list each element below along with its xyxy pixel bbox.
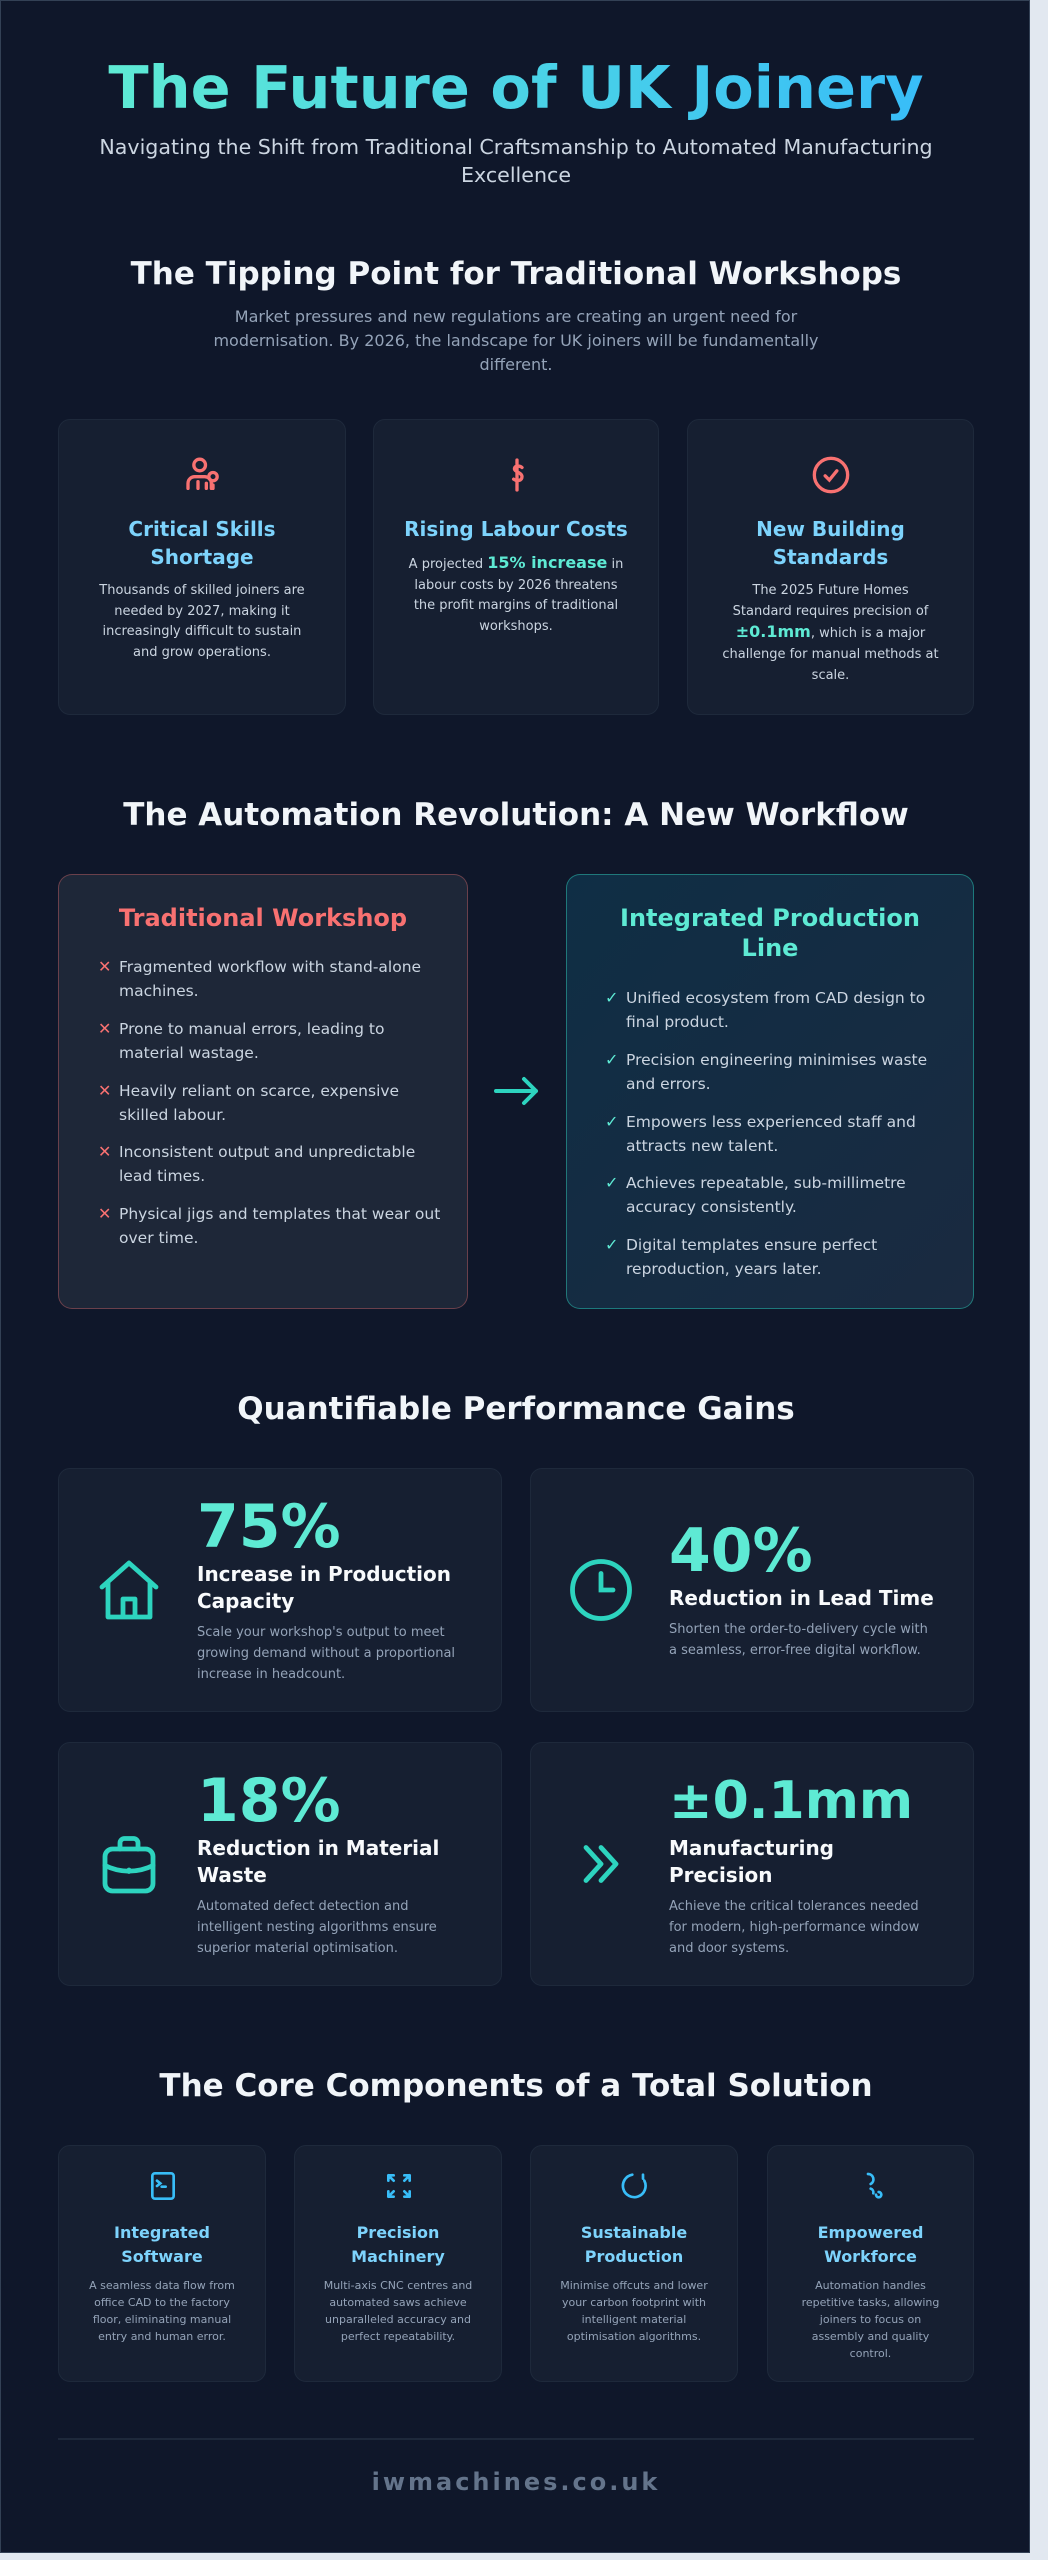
heading: performance gains: Quantifiable Performance Gains: [237, 1391, 795, 1427]
card: labour costs: A projected 15% increase in: [409, 553, 623, 572]
list: benefits: Achieves repeatable, sub-millimetre: [626, 1174, 906, 1192]
card: building standards: [687, 419, 974, 715]
panel: traditional workshop: ✕: [98, 1019, 111, 1038]
heading: tipping point: The Tipping Point for Traditional Workshops: [131, 256, 901, 292]
stat card: precision: ±0.1mm: [669, 1771, 913, 1831]
core card: workforce: Automation handles: [815, 2279, 926, 2292]
core card: machinery: Machinery: [351, 2247, 445, 2266]
card: labour costs: Rising Labour Costs: [404, 517, 628, 541]
footer: iwmachines.co.uk: [372, 2468, 660, 2496]
core card: sustainable: your carbon footprint with: [562, 2296, 706, 2309]
icon: briefcase: [102, 1836, 156, 1894]
title: The Future of UK Joinery: [108, 53, 924, 122]
core card: sustainable: intelligent material: [582, 2313, 686, 2326]
list: drawbacks: lead times.: [119, 1167, 205, 1185]
stat card: 18%: [58, 1742, 502, 1986]
card: building standards: The 2025 Future Homes: [752, 583, 909, 598]
stat card: 75%: Scale your workshop's output to meet: [197, 1625, 445, 1640]
core card: machinery: automated saws achieve: [329, 2296, 467, 2309]
icon: expand: [386, 2174, 412, 2198]
panel: integrated production line: ✓: [605, 988, 618, 1007]
icon: refresh: [622, 2173, 647, 2198]
core card: workforce: assembly and quality: [812, 2330, 929, 2343]
stat card: precision: Achieve the critical tolerances needed: [669, 1899, 919, 1914]
stat card: 75%: Capacity: [197, 1589, 294, 1613]
list: drawbacks: Physical jigs and templates that wear out: [119, 1205, 440, 1223]
card: skills shortage: Critical Skills: [128, 517, 276, 541]
stat card: 40%: a seamless, error-free digital workflow.: [669, 1643, 921, 1658]
stat card: precision: for modern, high-performance window: [669, 1920, 919, 1935]
stat card: 18%: superior material optimisation.: [197, 1941, 398, 1956]
card: skills shortage: and grow operations.: [133, 645, 271, 660]
core card: machinery: [294, 2145, 502, 2382]
panel: integrated production line: ✓: [605, 1235, 618, 1254]
stat card: 18%: intelligent nesting algorithms ensure: [197, 1920, 437, 1935]
panel: integrated production line: ✓: [605, 1050, 618, 1069]
subtitle: Excellence: [461, 163, 571, 187]
core card: sustainable: optimisation algorithms.: [567, 2330, 701, 2343]
intro paragraph: different.: [479, 355, 553, 374]
card: building standards: scale.: [812, 668, 849, 683]
card: skills shortage: Shortage: [150, 545, 254, 569]
list: benefits: reproduction, years later.: [626, 1260, 822, 1278]
core card: software: office CAD to the factory: [94, 2296, 230, 2309]
icon: check circle: [812, 456, 850, 494]
list: drawbacks: Prone to manual errors, leading to: [119, 1020, 384, 1038]
arrow: [494, 1076, 538, 1106]
panel: traditional workshop: ✕: [98, 957, 111, 976]
heading: core components: The Core Components of a Total Solution: [159, 2068, 873, 2104]
panel title: Traditional Workshop: [119, 904, 407, 932]
card: building standards: challenge for manual methods at: [722, 647, 939, 662]
panel: traditional workshop: [58, 874, 468, 1309]
panel title: Integrated Production: [620, 904, 920, 932]
core card: software: A seamless data flow from: [89, 2279, 235, 2292]
stat card: 40%: Shorten the order-to-delivery cycle with: [669, 1622, 928, 1637]
card: labour costs: [373, 419, 659, 715]
list: drawbacks: machines.: [119, 982, 199, 1000]
core card: sustainable: Minimise offcuts and lower: [560, 2279, 708, 2292]
stat card: 75%: Increase in Production: [197, 1562, 451, 1586]
list: benefits: attracts new talent.: [626, 1137, 778, 1155]
core card: sustainable: Sustainable: [581, 2223, 687, 2242]
card: labour costs: workshops.: [479, 619, 553, 634]
core card: workforce: [767, 2145, 974, 2382]
core card: software: [58, 2145, 266, 2382]
card: building standards: Standard requires precision of: [733, 604, 928, 619]
stat card: 75%: [58, 1468, 502, 1712]
icon: terminal: [151, 2172, 175, 2200]
list: benefits: and errors.: [626, 1075, 711, 1093]
subtitle: Navigating the Shift from Traditional Craftsmanship to Automated Manufacturing: [99, 135, 933, 159]
card: skills shortage: [58, 419, 346, 715]
panel: traditional workshop: ✕: [98, 1081, 111, 1100]
list: benefits: Empowers less experienced staff and: [626, 1113, 916, 1131]
core card: workforce: repetitive tasks, allowing: [802, 2296, 939, 2309]
list: benefits: accuracy consistently.: [626, 1198, 797, 1216]
intro paragraph: [213, 307, 819, 374]
stat card: precision: and door systems.: [669, 1941, 789, 1956]
stat card: 75%: growing demand without a proportional: [197, 1646, 455, 1661]
core card: machinery: Multi-axis CNC centres and: [324, 2279, 472, 2292]
stat card: 18%: Reduction in Material: [197, 1836, 439, 1860]
panel: traditional workshop: ✕: [98, 1204, 111, 1223]
icon: house: [100, 1560, 158, 1620]
core card: machinery: unparalleled accuracy and: [325, 2313, 471, 2326]
card: skills shortage: Thousands of skilled joiners are: [99, 583, 305, 598]
stat card: 18%: Automated defect detection and: [197, 1899, 408, 1914]
panel title: [620, 904, 920, 962]
icon: users: [186, 458, 219, 490]
core card: software: floor, eliminating manual: [93, 2313, 231, 2326]
core card: workforce: Empowered: [818, 2223, 923, 2242]
panel title: Line: [742, 934, 798, 962]
icon: workforce: [866, 2172, 883, 2199]
icon: chevrons: [584, 1845, 618, 1883]
list: drawbacks: Inconsistent output and unpredictable: [119, 1143, 415, 1161]
stat card: 40%: 40%: [669, 1516, 813, 1586]
card: building standards: ±0.1mm, which is a major: [736, 622, 925, 641]
core card: workforce: joiners to focus on: [820, 2313, 921, 2326]
card: skills shortage: increasingly difficult to sustain: [103, 624, 301, 639]
stat card: precision: Manufacturing: [669, 1836, 834, 1860]
panel: traditional workshop: ✕: [98, 1142, 111, 1161]
core card: machinery: Precision: [357, 2223, 439, 2242]
list: drawbacks: over time.: [119, 1229, 198, 1247]
core card: workforce: control.: [850, 2347, 891, 2360]
card: skills shortage: needed by 2027, making it: [114, 604, 290, 619]
list: drawbacks: [98, 957, 440, 1247]
card: building standards: Standards: [773, 545, 888, 569]
list: drawbacks: material wastage.: [119, 1044, 259, 1062]
card: labour costs: the profit margins of traditional: [414, 598, 618, 613]
stat card: 40%: Reduction in Lead Time: [669, 1586, 934, 1610]
card: labour costs: labour costs by 2026 threatens: [414, 578, 618, 593]
intro paragraph: modernisation. By 2026, the landscape for UK joiners will be fundamentally: [213, 331, 819, 350]
panel: integrated production line: ✓: [605, 1112, 618, 1131]
list: benefits: Precision engineering minimises waste: [626, 1051, 927, 1069]
list: benefits: Unified ecosystem from CAD design to: [626, 989, 925, 1007]
icon: dollar: [512, 458, 524, 492]
subtitle: [99, 135, 933, 187]
card: building standards: New Building: [756, 517, 905, 541]
core card: machinery: perfect repeatability.: [341, 2330, 455, 2343]
list: benefits: [605, 988, 927, 1278]
core card: workforce: Workforce: [824, 2247, 917, 2266]
core card: software: Software: [121, 2247, 203, 2266]
core card: software: entry and human error.: [98, 2330, 226, 2343]
panel: integrated production line: ✓: [605, 1173, 618, 1192]
list: benefits: Digital templates ensure perfect: [626, 1236, 877, 1254]
list: benefits: final product.: [626, 1013, 729, 1031]
stat card: precision: Precision: [669, 1863, 773, 1887]
stat card: 75%: 75%: [197, 1492, 341, 1562]
intro paragraph: Market pressures and new regulations are creating an urgent need for: [235, 307, 797, 326]
core card: sustainable: [530, 2145, 738, 2382]
stat card: precision: [530, 1742, 974, 1986]
core card: software: Integrated: [114, 2223, 210, 2242]
core card: sustainable: Production: [585, 2247, 683, 2266]
heading: automation revolution: The Automation Revolution: A New Workflow: [123, 797, 909, 833]
icon: clock: [570, 1559, 632, 1621]
panel: integrated production line: [566, 874, 974, 1309]
list: drawbacks: skilled labour.: [119, 1106, 226, 1124]
list: drawbacks: Fragmented workflow with stand-alone: [119, 958, 421, 976]
stat card: 18%: Waste: [197, 1863, 267, 1887]
stat card: 40%: [530, 1468, 974, 1712]
list: drawbacks: Heavily reliant on scarce, expensive: [119, 1082, 399, 1100]
stat card: 75%: increase in headcount.: [197, 1667, 345, 1682]
stat card: 18%: 18%: [197, 1766, 341, 1836]
